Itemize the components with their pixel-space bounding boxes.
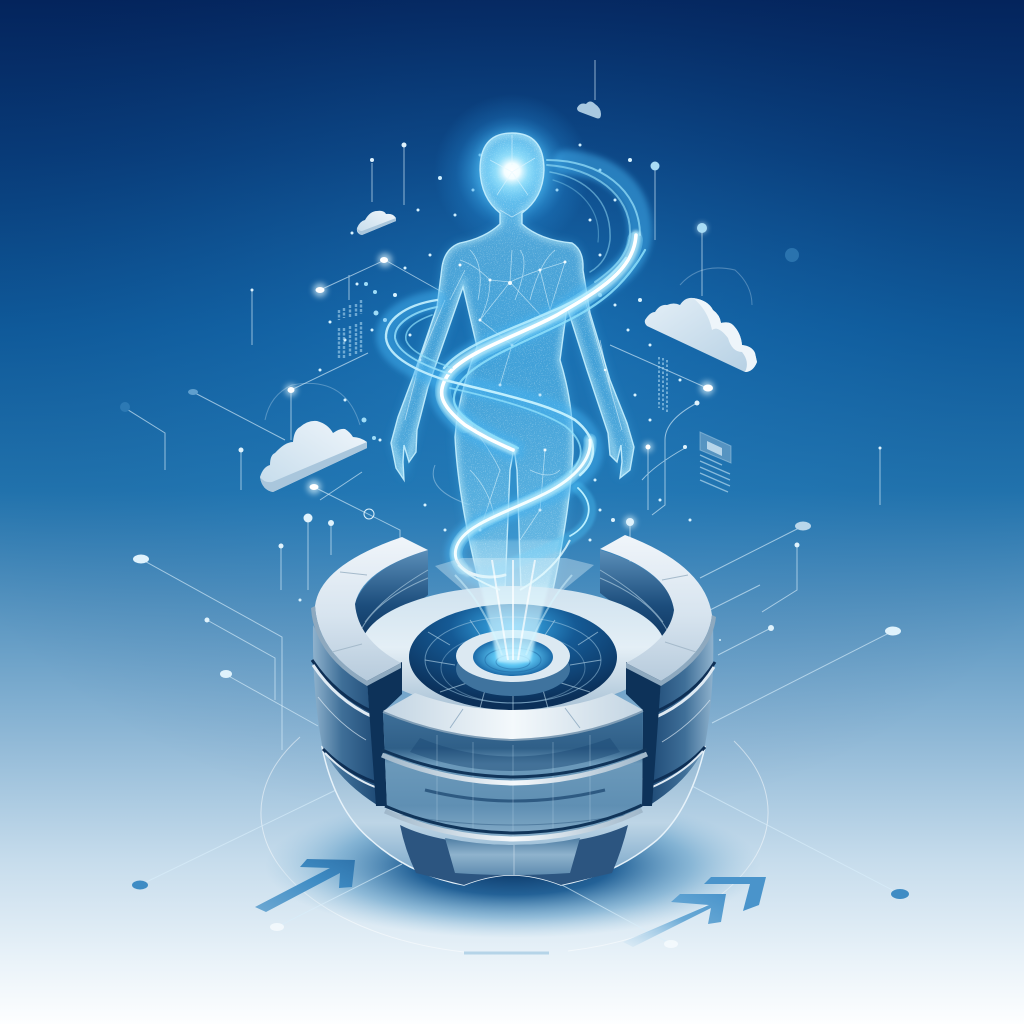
central pit [409,604,617,710]
cloud left [260,421,367,492]
front block glass [383,710,643,838]
node halos [285,223,714,528]
nodes [120,142,909,948]
lower band [385,805,642,839]
body sparkles [419,260,606,532]
human figure body [385,130,640,595]
cloud right [645,298,757,372]
light beam from core [455,540,572,662]
data panel right [700,432,731,492]
dark connectors [367,662,661,806]
neural network in body [405,135,622,540]
floor circle lines [261,737,768,953]
head light core [482,141,542,201]
head halo [434,94,590,250]
front block top [383,693,643,740]
platform ring [361,586,665,710]
left wing [311,537,428,686]
floating particles [298,144,721,641]
arrow right double chevron [623,877,766,947]
data column right [659,357,667,414]
cloud top small [577,102,601,118]
energy ribbon [386,160,645,577]
arrow left [255,859,355,912]
figure glow [391,133,634,590]
right wing [600,535,716,686]
left well [354,550,428,642]
upper band [382,749,647,783]
data grid left [339,300,361,358]
shadow under base [265,794,761,938]
right well [600,550,675,642]
base lower dark section [400,825,628,885]
translucent floating panel [435,558,594,605]
cloud upper left [357,211,396,235]
network lines [125,60,900,944]
central ring [456,630,570,696]
left side panels [312,625,377,805]
right side panels [648,625,715,805]
base outer glass bowl [322,747,705,885]
